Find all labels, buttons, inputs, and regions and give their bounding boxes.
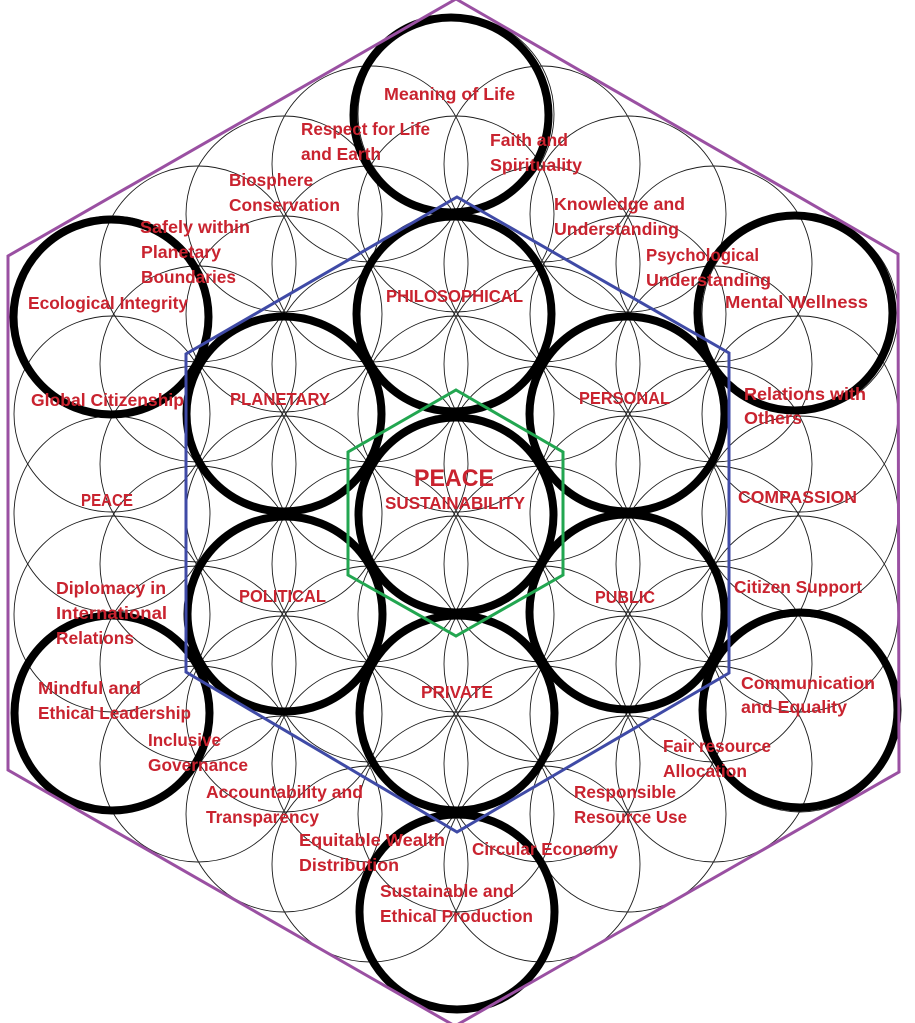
label: global citizenship: Global Citizenship [31, 390, 184, 410]
label: safely within planetary boundaries: Planetary [141, 242, 221, 262]
label: citizen support: Citizen Support [734, 577, 862, 597]
label: accountability and transparency [206, 782, 363, 827]
label: equitable wealth distribution: Distribution [299, 855, 399, 875]
label: respect for life and earth: and Earth [301, 144, 381, 164]
label: mindful and ethical leadership: Ethical Leadership [38, 703, 191, 723]
label: biosphere conservation: Conservation [229, 195, 340, 215]
label: inclusive governance [148, 730, 248, 775]
label: respect for life and earth: Respect for Life [301, 119, 430, 139]
label: circular economy: Circular Economy [472, 839, 618, 859]
label: faith and spirituality [490, 130, 582, 175]
label: political: POLITICAL [239, 586, 326, 606]
label: responsible resource use [574, 782, 687, 827]
label: inclusive governance: Inclusive [148, 730, 221, 750]
label: peace, left: PEACE [81, 490, 133, 510]
thick inner circles [186, 216, 724, 810]
label: biosphere conservation [229, 170, 340, 215]
label: responsible resource use: Resource Use [574, 807, 687, 827]
label: relations with others [744, 384, 866, 428]
label: knowledge and understanding: Knowledge and [554, 194, 685, 214]
label: public: PUBLIC [595, 587, 655, 607]
label: communication and equality [741, 673, 875, 717]
label: respect for life and earth [301, 119, 430, 164]
label: responsible resource use: Responsible [574, 782, 676, 802]
label: philosophical: PHILOSOPHICAL [386, 286, 523, 306]
centre label: peace and sustainability: PEACE [414, 465, 494, 492]
middle blue hexagon [186, 197, 729, 832]
label: equitable wealth distribution [299, 830, 445, 875]
label: mental wellness: Mental Wellness [725, 292, 868, 312]
centre label: peace and sustainability: SUSTAINABILITY [385, 493, 525, 513]
label: private: PRIVATE [421, 682, 493, 702]
label: fair resource allocation: Fair resource [663, 736, 771, 756]
label: communication and equality: Communication [741, 673, 875, 693]
label: accountability and transparency: Accountability and [206, 782, 363, 802]
label: mindful and ethical leadership [38, 678, 191, 723]
label: sustainable and ethical production: Sustainable and [380, 881, 514, 901]
label: personal: PERSONAL [579, 388, 670, 408]
label: knowledge and understanding: Understanding [554, 219, 679, 239]
label: diplomacy in international relations: International [56, 603, 167, 623]
label: ecological integrity: Ecological Integrity [28, 293, 188, 313]
label: fair resource allocation [663, 736, 771, 781]
label: knowledge and understanding [554, 194, 685, 239]
label: relations with others: Relations with [744, 384, 866, 404]
label: sustainable and ethical production [380, 881, 533, 926]
label: diplomacy in international relations: Diplomacy in [56, 578, 166, 598]
label: psychological understanding: Psychological [646, 245, 759, 265]
label: safely within planetary boundaries: Safely within [140, 217, 250, 237]
label: relations with others: Others [744, 408, 802, 428]
inner green hexagon [348, 390, 563, 636]
label: compassion: COMPASSION [738, 487, 857, 507]
label: psychological understanding [646, 245, 771, 290]
label: mindful and ethical leadership: Mindful and [38, 678, 141, 698]
label: biosphere conservation: Biosphere [229, 170, 313, 190]
label: diplomacy in international relations [56, 578, 167, 648]
label: sustainable and ethical production: Ethical Production [380, 906, 533, 926]
label: diplomacy in international relations: Relations [56, 628, 134, 648]
label: faith and spirituality: Spirituality [490, 155, 582, 175]
label: safely within planetary boundaries [140, 217, 250, 287]
label: communication and equality: and Equality [741, 697, 847, 717]
label: psychological understanding: Understanding [646, 270, 771, 290]
centre label: peace and sustainability [385, 465, 525, 513]
label: fair resource allocation: Allocation [663, 761, 747, 781]
label: inclusive governance: Governance [148, 755, 248, 775]
label: accountability and transparency: Transparency [206, 807, 319, 827]
label: faith and spirituality: Faith and [490, 130, 568, 150]
label: equitable wealth distribution: Equitable Wealth [299, 830, 445, 850]
label: meaning of life: Meaning of Life [384, 84, 515, 104]
label: planetary: PLANETARY [230, 389, 330, 409]
label: safely within planetary boundaries: Boundaries [141, 267, 236, 287]
